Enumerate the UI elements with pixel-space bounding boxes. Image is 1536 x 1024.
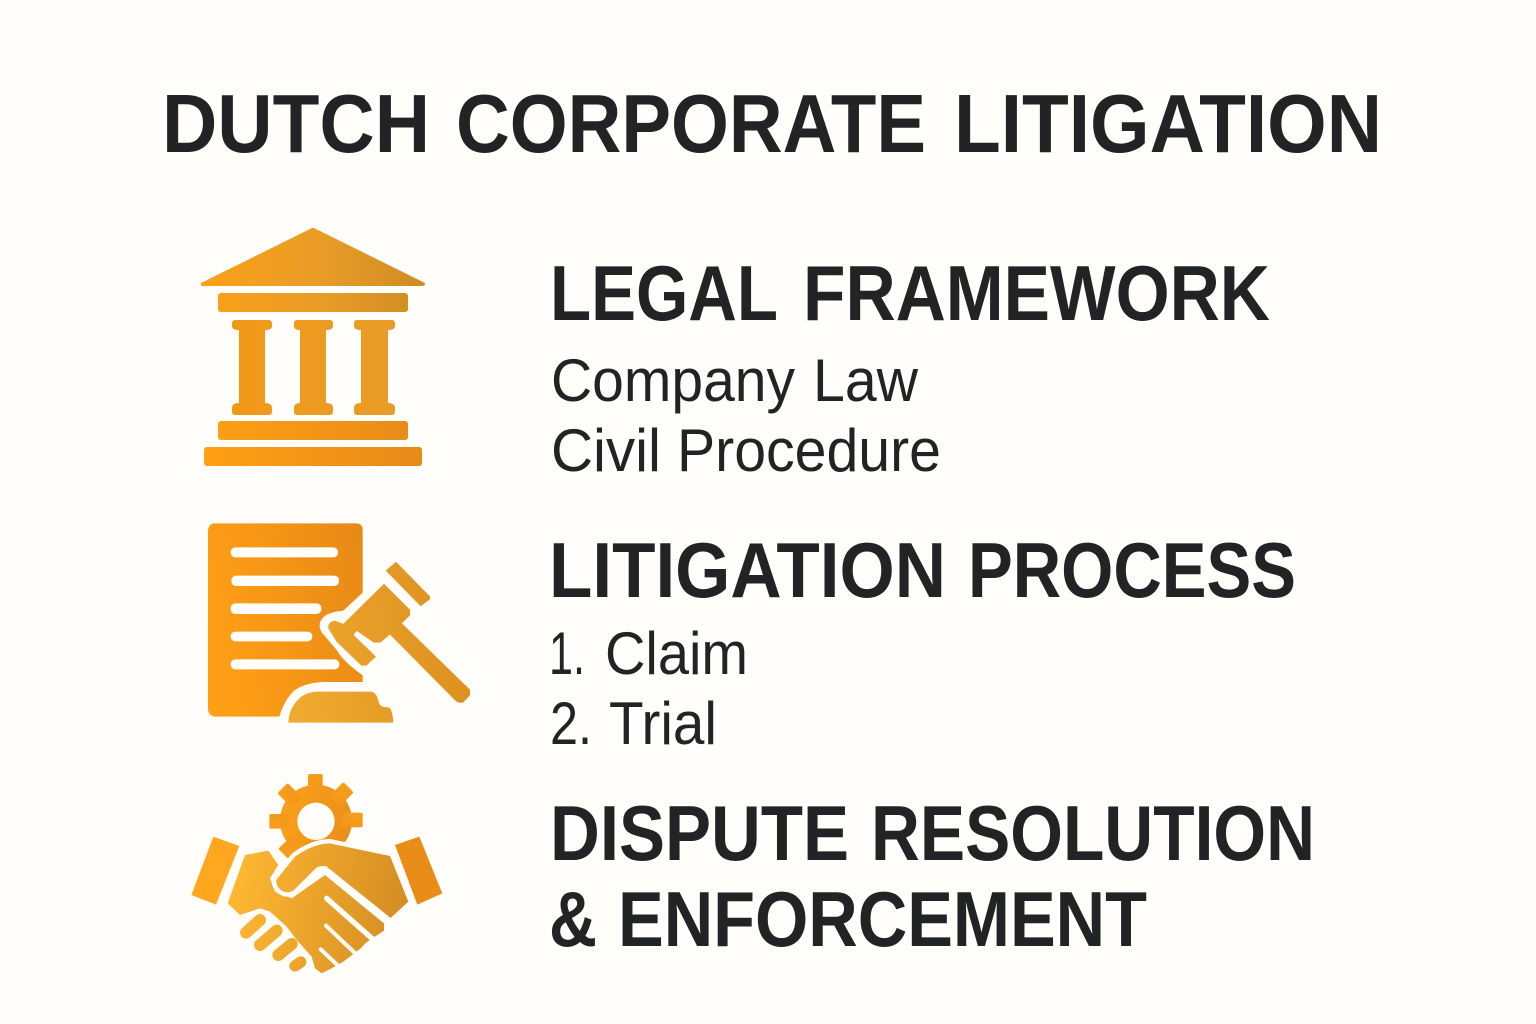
icon: courthouse xyxy=(201,228,425,466)
text: company law: Law xyxy=(813,347,919,414)
heading: litigation process xyxy=(549,526,1296,614)
title: LITIGATION xyxy=(954,77,1382,170)
heading: enforcement: ENFORCEMENT xyxy=(618,875,1147,963)
heading: enforcement: & xyxy=(549,875,597,963)
title: CORPORATE xyxy=(456,77,926,170)
upper hand xyxy=(276,843,408,918)
right cuff xyxy=(395,837,442,905)
heading: litigation process: LITIGATION xyxy=(549,526,946,614)
title xyxy=(162,77,1382,170)
text: civil procedure: Civil xyxy=(551,417,661,484)
text: company law xyxy=(551,347,919,414)
heading: legal framework: LEGAL xyxy=(550,249,778,337)
heading: legal framework xyxy=(550,249,1270,337)
clasped hand xyxy=(228,851,384,973)
heading: dispute resolution: RESOLUTION xyxy=(871,789,1315,877)
text: company law: Company xyxy=(551,347,795,414)
text: step 2 trial: 2. xyxy=(550,690,592,757)
text: step 1 claim xyxy=(549,620,748,687)
icon: document and gavel xyxy=(208,523,469,722)
icon: handshake with gear xyxy=(191,774,442,973)
text: civil procedure: Procedure xyxy=(677,417,941,484)
left cuff xyxy=(191,837,239,905)
heading: dispute resolution xyxy=(550,789,1315,877)
text: step 2 trial: Trial xyxy=(609,690,717,757)
heading: litigation process: PROCESS xyxy=(968,526,1296,614)
gear xyxy=(269,774,363,859)
text: step 2 trial xyxy=(550,690,717,757)
text: step 1 claim: 1. xyxy=(549,620,585,687)
text: civil procedure xyxy=(551,417,941,484)
heading: dispute resolution: DISPUTE xyxy=(550,789,849,877)
text: step 1 claim: Claim xyxy=(605,620,748,687)
title: DUTCH xyxy=(162,77,430,170)
heading: legal framework: FRAMEWORK xyxy=(803,249,1270,337)
fingers xyxy=(246,920,301,966)
